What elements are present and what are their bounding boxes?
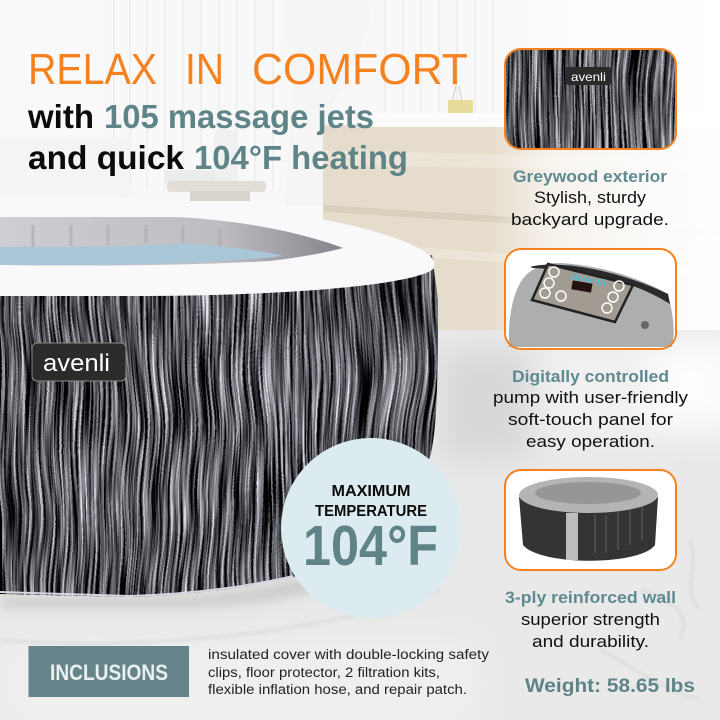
background tub edge: [0, 138, 130, 198]
base trim: [0, 576, 293, 596]
pump body: [509, 263, 674, 347]
text: greywood exterior: [511, 167, 669, 229]
text: wall: and durability.: [532, 632, 649, 651]
text: greywood exterior: Greywood exterior: [513, 167, 667, 186]
inclusions label: [28, 646, 189, 697]
text: greywood exterior: backyard upgrade.: [511, 210, 669, 229]
water: [0, 243, 283, 265]
logo badge: [32, 343, 126, 381]
floor shading: [0, 340, 720, 720]
subtitle: with: [27, 98, 94, 135]
logo badge: avenli: [43, 350, 110, 377]
text: pump: Digitally controlled: [512, 367, 669, 386]
reed diffuser: [448, 86, 473, 113]
card: wall: [505, 470, 676, 570]
text: pump: easy operation.: [526, 432, 655, 451]
inflatable rim: [0, 196, 434, 296]
card: greywood exterior: avenli: [571, 70, 606, 84]
towel: [282, 0, 369, 205]
tub wood body: [0, 250, 440, 600]
temperature badge: [281, 438, 461, 618]
floor water ripples: [0, 540, 700, 700]
title: RELAX: [28, 45, 157, 94]
subtitle: and quick: [28, 139, 185, 176]
interior pleats: [33, 225, 255, 252]
inclusions text: insulated cover with double-locking safety: [208, 647, 489, 662]
side table with items: [165, 130, 266, 201]
text: pump: pump with user-friendly: [493, 388, 689, 407]
inclusions text: flexible inflation hose, and repair patch.: [208, 682, 467, 697]
text: wall: 3-ply reinforced wall: [505, 588, 676, 607]
subtitle: [27, 98, 408, 176]
tub interior: [0, 217, 343, 266]
hot tub: [0, 196, 440, 608]
subtitle: 104°F heating: [194, 139, 408, 176]
tub shadow: [0, 545, 380, 608]
text: pump: soft-touch panel for: [508, 410, 673, 429]
right column light wash: [490, 0, 720, 330]
title: [28, 45, 468, 94]
small tub: [519, 497, 658, 561]
temperature badge: MAXIMUM: [332, 483, 410, 500]
title: COMFORT: [252, 45, 468, 94]
control panel: [532, 264, 633, 322]
card: pump: avenli: [569, 271, 607, 289]
subtitle: 105 massage jets: [104, 98, 374, 135]
inclusions text: clips, floor protector, 2 filtration kits,: [208, 665, 440, 680]
title: IN: [185, 45, 224, 94]
temperature badge: 104°F: [303, 514, 438, 578]
inclusions label: INCLUSIONS: [50, 660, 168, 685]
card: pump: [505, 249, 676, 349]
weight: Weight: 58.65 lbs: [525, 676, 695, 697]
temperature badge: TEMPERATURE: [315, 503, 427, 520]
text: greywood exterior: Stylish, sturdy: [534, 188, 647, 207]
wall tiles: [105, 0, 720, 200]
text: wall: [505, 588, 676, 651]
inclusions text: [208, 647, 489, 697]
text: pump: [493, 367, 689, 451]
floor: [0, 325, 720, 720]
text: wall: superior strength: [521, 610, 660, 629]
card: greywood exterior: [505, 49, 676, 149]
cabinet: [323, 113, 720, 330]
